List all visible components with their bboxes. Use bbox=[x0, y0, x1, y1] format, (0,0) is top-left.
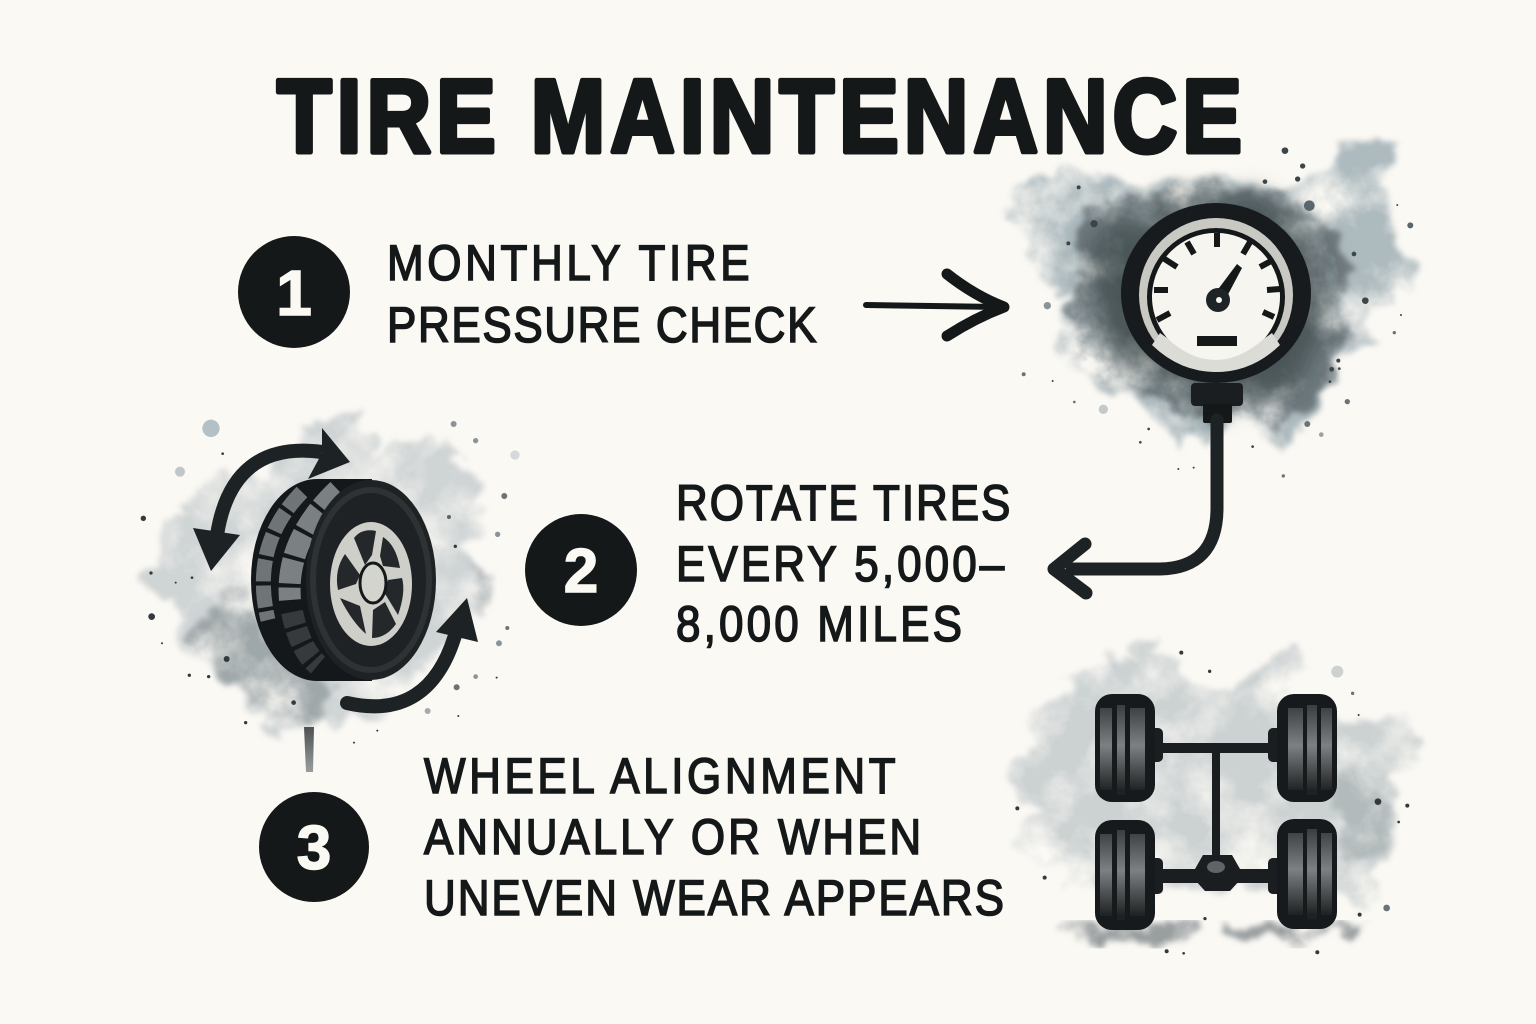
step 2 text: ROTATE TIRES bbox=[676, 474, 1010, 531]
wheel rim bbox=[330, 522, 412, 646]
tire: rear left bbox=[1095, 820, 1155, 930]
tire: front left bbox=[1095, 694, 1155, 802]
step 1 badge: 1 bbox=[276, 257, 312, 329]
wash: tire bbox=[137, 420, 520, 744]
step 3 text: ANNUALLY OR WHEN bbox=[424, 808, 921, 865]
step 3 badge: 3 bbox=[297, 814, 331, 883]
step 3 text: WHEEL ALIGNMENT bbox=[424, 747, 896, 804]
gauge needle bbox=[1213, 264, 1242, 302]
tire sidewall bbox=[306, 480, 436, 680]
arrow: step 1 to gauge bbox=[866, 274, 1004, 336]
gauge readout bar bbox=[1197, 336, 1237, 346]
arrow: rotation top double headed bbox=[193, 428, 350, 571]
title: TIRE MAINTENANCE bbox=[277, 58, 1242, 175]
step 1 text: MONTHLY TIRE bbox=[387, 234, 750, 291]
gauge dial bbox=[1147, 228, 1285, 366]
tire: rear right bbox=[1277, 819, 1337, 929]
gauge bezel bbox=[1139, 218, 1293, 372]
gauge ticks bbox=[1154, 233, 1280, 320]
step 2 text: 8,000 MILES bbox=[676, 595, 962, 652]
speckles bbox=[1022, 147, 1413, 478]
step 2 badge: 2 bbox=[564, 537, 598, 606]
speckles bbox=[141, 420, 520, 744]
step 3 badge bbox=[259, 792, 369, 902]
tire: front right bbox=[1277, 694, 1337, 802]
icon: pressure gauge bbox=[1121, 203, 1311, 423]
axle frame bbox=[1148, 728, 1285, 894]
speckles bbox=[1015, 651, 1409, 955]
wheel hub bbox=[360, 563, 386, 603]
step 3 text: UNEVEN WEAR APPEARS bbox=[424, 869, 1004, 926]
step 1 text bbox=[387, 234, 816, 353]
icon: tire with rotation arrows bbox=[193, 428, 478, 706]
gauge case bbox=[1121, 203, 1311, 383]
step 2 text bbox=[676, 474, 1010, 652]
step 1 badge bbox=[238, 236, 350, 348]
arrow: rotation bottom bbox=[347, 598, 478, 706]
arrow: gauge hose to step 2 bbox=[1054, 420, 1217, 593]
step 3 text bbox=[424, 747, 1004, 926]
icon: axle and wheels bbox=[1095, 694, 1337, 930]
gauge neck bbox=[1191, 383, 1243, 406]
wash: gauge bbox=[1003, 140, 1420, 478]
tire tread bbox=[251, 479, 383, 681]
step 2 badge bbox=[525, 514, 637, 626]
connector line bbox=[304, 727, 314, 772]
step 2 text: EVERY 5,000– bbox=[676, 535, 1005, 592]
step 1 text: PRESSURE CHECK bbox=[387, 296, 816, 353]
wash: axle bbox=[1007, 647, 1420, 955]
